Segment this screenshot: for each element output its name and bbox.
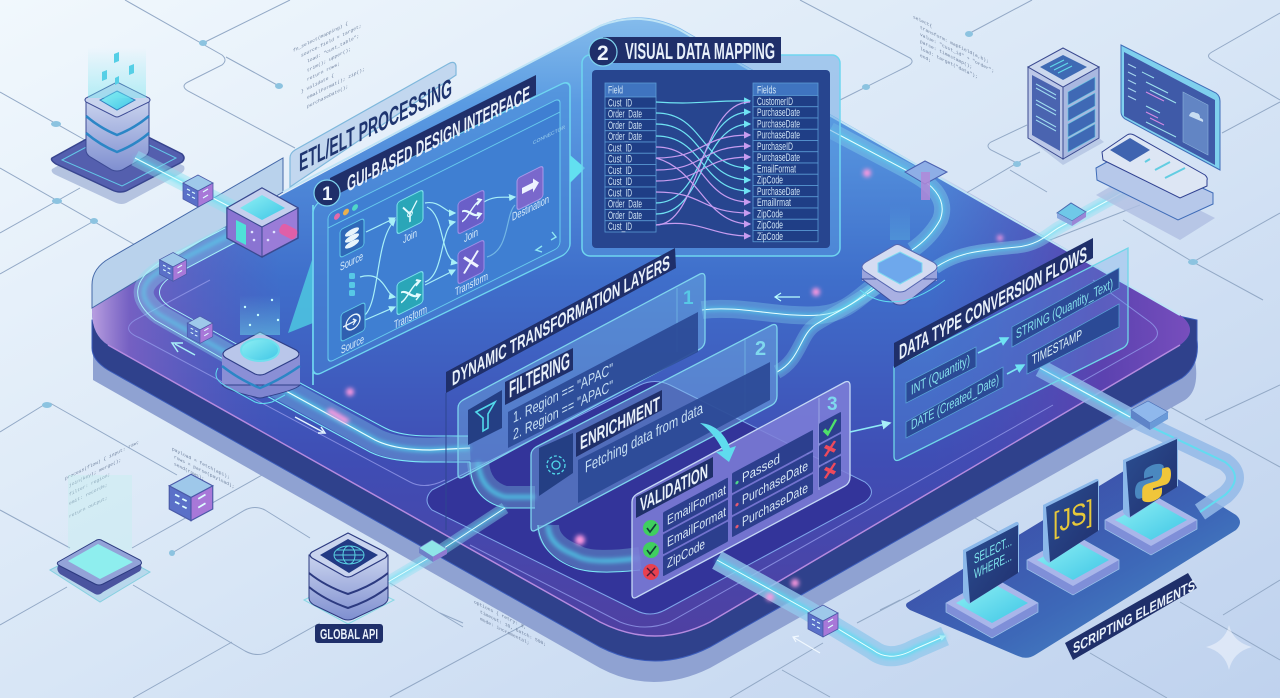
arrow: GUI to mapping [570, 155, 585, 183]
window [328, 95, 565, 363]
network node dots [42, 31, 1198, 556]
status circles [643, 520, 659, 580]
link box near workstation [1057, 203, 1086, 226]
mapping curves [656, 101, 750, 236]
connector box on conversion flow [1131, 401, 1168, 430]
flow: left loop [138, 228, 240, 360]
node: join second: Join [464, 225, 478, 245]
purple-blue main platform [92, 17, 1190, 636]
process cube: top [183, 175, 213, 207]
floor cube [169, 474, 213, 521]
target table: PurchaseDate [757, 118, 800, 130]
source table: Cust_ID [608, 154, 632, 166]
flow: validation to scripting [717, 560, 945, 656]
code snippet: bottom left: join(key); merge(); [69, 457, 121, 489]
source table: Order_Date [608, 108, 642, 120]
chip: TIMESTAMP: TIMESTAMP [1032, 326, 1082, 369]
flow: top edge to hub [830, 130, 942, 250]
code snippet: top centre: purchaseDate(); [307, 84, 348, 110]
code snippet: top centre: emailFormat(); zip(); [307, 66, 365, 101]
source table: Cust_ID [608, 98, 632, 110]
source table: Cust_ID [608, 188, 632, 200]
layer 3: validation [632, 382, 850, 598]
target table: PurchaseDate [757, 152, 800, 164]
layer 3: validation: VALIDATION [640, 459, 708, 517]
nav chevrons [536, 232, 556, 252]
code snippet: top right: select{ [913, 14, 932, 30]
card: SQL: WHERE... [974, 549, 1012, 583]
monitor [1121, 45, 1220, 170]
label: global API [315, 624, 383, 643]
pedestal: JS [1027, 534, 1119, 595]
card: JS: [JS] [1053, 493, 1093, 541]
layer 1: filtering: FILTERING [509, 348, 570, 404]
card: SQL [963, 522, 1019, 604]
code snippet: top right: parse: timestamp(); [920, 39, 972, 71]
node: join [397, 190, 423, 249]
panel glass [313, 80, 570, 377]
validation rows: ZipCode [667, 537, 705, 572]
python logo [1135, 459, 1171, 507]
process cube: left [160, 252, 186, 281]
code snippet: top centre: } validate { [301, 73, 334, 95]
layer divider line [445, 393, 447, 530]
code snippet: top centre: source.field = target; [301, 23, 361, 59]
card: JS [1043, 479, 1099, 563]
server rack [1028, 48, 1104, 165]
code snippet: bottom middle [474, 599, 546, 655]
sparkle mark [1206, 625, 1252, 670]
right purple tint [930, 170, 1190, 490]
heading banner: 2 [597, 42, 609, 65]
layer 1: filtering: 2. Region == "APAC" [513, 378, 613, 444]
code snippet: bottom middle: timeout: 10, batch: 500; [480, 609, 546, 648]
node: destination [512, 162, 549, 224]
code snippet: top right [913, 14, 994, 96]
target table: EmailFormat [757, 164, 796, 176]
heading banner [894, 238, 1093, 368]
heading banner: DYNAMIC TRANSFORMATION LAYERS [452, 251, 670, 391]
round node [216, 295, 300, 404]
flow: centre-left bends [470, 462, 640, 572]
target table [753, 83, 818, 243]
code snippet: top centre: trim(); upper(); [307, 46, 351, 74]
chip: INT [906, 347, 976, 403]
validation rows: PurchaseDate [742, 480, 808, 531]
pink data particles [326, 169, 1003, 601]
node: transform second: Transform [455, 269, 488, 299]
heading banner: GUI-BASED DESIGN INTERFACE [347, 81, 530, 197]
code snippet: top right: transform: mapField(a,b); [920, 25, 989, 65]
source table: Field [608, 84, 623, 96]
code snippet: bottom left: emit: records; [69, 482, 107, 507]
chip: DATE: DATE (Created_Date) [911, 371, 999, 434]
code snippet: top centre: fn_select(mapping) { [293, 21, 348, 54]
validation rows: Passed [742, 451, 780, 487]
source table: Cust_ID [608, 165, 632, 177]
panel: dynamic transformation layers [446, 248, 850, 598]
node: transform: Transform [394, 302, 427, 332]
node: source: Source [340, 249, 363, 274]
source table: Order_Date [608, 198, 642, 210]
node: join second [458, 190, 484, 248]
source table: Cust_ID [608, 221, 632, 233]
node: source second [341, 302, 365, 357]
target table: ZipCode [757, 231, 783, 243]
node: source [340, 218, 364, 274]
target table: PurchaseDate [757, 186, 800, 198]
target table: ZipCode [757, 208, 783, 220]
left purple tint [92, 197, 280, 442]
scripting base [906, 462, 1240, 658]
flow: centre to hub upper [702, 282, 880, 315]
rim highlight [108, 345, 1180, 636]
layer 3: validation: 3 [827, 394, 838, 415]
layer 1: filtering: 1. Region == "APAC" [513, 361, 613, 427]
pale pad [50, 475, 150, 602]
chip: STRING [1012, 268, 1119, 347]
flow: lower-left channel [265, 375, 470, 462]
global API database [304, 533, 394, 624]
title banner: ETL/ELT processing: ETL/ELT PROCESSING [299, 72, 452, 178]
heading banner: VISUAL DATA MAPPING [625, 38, 775, 64]
panel glass [582, 55, 840, 256]
process cube: bottom [808, 605, 838, 637]
card: Python [1123, 437, 1178, 518]
shadow under platform [93, 300, 1196, 682]
source table [605, 83, 656, 233]
layer 2: enrichment: 2 [755, 338, 766, 360]
source table: Order_Date [608, 131, 642, 143]
chip: INT: INT (Quantity) [911, 352, 970, 399]
inner dark tray [427, 382, 872, 614]
card: SQL: SELECT... [974, 534, 1012, 568]
validation rows: EmailFormat [667, 504, 726, 551]
target table: EmailIrmat [757, 197, 791, 209]
target table: PurchaseDate [757, 130, 800, 142]
process cube: lower left [187, 316, 213, 343]
stack dots [349, 273, 355, 296]
flow: API to platform [388, 508, 505, 582]
flow: data panel to python [1040, 368, 1235, 512]
heading banner: 1 [322, 184, 333, 205]
code snippet: top right: end; [920, 53, 931, 64]
code snippet: bottom left [65, 439, 139, 522]
label: scripting elements: SCRIPTING ELEMENTS [1073, 577, 1195, 658]
validation rows: EmailFormat [667, 482, 726, 529]
layer 2: enrichment [531, 324, 777, 531]
code snippet: bottom centre: send(rows); [174, 461, 204, 482]
hub node right [860, 205, 945, 305]
flow: source to first cube [135, 158, 240, 212]
code snippet: bottom middle: options { retry: 3, [474, 599, 526, 631]
heading banner [314, 75, 536, 206]
node: transform [394, 268, 427, 332]
upper edge highlight [283, 19, 1180, 315]
chip: DATE [906, 367, 1003, 438]
conversion arrows [978, 338, 1024, 374]
validation rows: PurchaseDate [742, 458, 808, 509]
target table: CustomerID [757, 96, 793, 108]
target table: PurchaseID [757, 141, 793, 153]
heading banner [589, 37, 781, 66]
code snippet: top centre: return rows; [307, 61, 340, 83]
panel: visual data mapping [582, 37, 840, 256]
target table: Fields [757, 84, 776, 96]
left flow arrow [172, 343, 195, 355]
source table: Order_Date [608, 120, 642, 132]
heading banner [446, 248, 676, 393]
connector box near API [419, 540, 447, 562]
pedestal: Python [1105, 494, 1197, 555]
target table: ZipCode [757, 220, 783, 232]
code snippet: top right: value: "cust_id" + "order"; [920, 32, 994, 75]
curved arrow: enrichment to validation [700, 423, 736, 462]
code snippet: bottom left: return output; [69, 495, 107, 520]
source table: Cust_ID [608, 176, 632, 188]
panel: GUI-based design interface [313, 75, 570, 377]
window: CONNECTOR [533, 125, 565, 146]
node: source second: Source [341, 332, 364, 357]
code snippet: bottom middle: mode: incremental; [480, 616, 529, 647]
layer 1: filtering: 1 [683, 288, 694, 309]
code snippet: bottom centre: rows = parse(payload); [174, 454, 234, 490]
label: scripting elements [1065, 573, 1197, 660]
navy platform layer [92, 200, 1197, 661]
layer 2: enrichment: Fetching data from data [585, 399, 703, 477]
validation heading [636, 457, 713, 518]
layer 1: filtering [458, 274, 705, 478]
target table: ZipCode [757, 174, 783, 186]
code snippet: top centre: load: "cust_table"; [307, 33, 359, 65]
code snippet: top centre [293, 12, 365, 117]
globe icon [334, 546, 364, 564]
panel: data type conversion flows [894, 238, 1128, 460]
code snippet: bottom left: filter: region; [69, 472, 110, 498]
floor arrow [793, 636, 820, 653]
arrow: validation to conversion [850, 423, 890, 432]
workstation slabs [1096, 134, 1215, 240]
main hub cube [227, 188, 299, 257]
code snippet: bottom centre: payload = fetch(api); [172, 446, 230, 481]
code snippet: top right: load: target("data"); [920, 46, 978, 80]
validation card [632, 382, 850, 598]
small tag on edge [905, 161, 947, 200]
lower flow arrow [295, 417, 325, 433]
code snippet: bottom left: process(flow) { input: raw; [65, 439, 139, 482]
source database [52, 48, 184, 204]
heading text: DATA TYPE CONVERSION FLOWS [899, 242, 1087, 365]
title banner: ETL/ELT processing [290, 62, 456, 187]
source table: Order_Date [608, 210, 642, 222]
chip: STRING: STRING (Quantity_Text) [1016, 275, 1113, 343]
code snippet: bottom centre [172, 446, 234, 497]
glass backing edge [288, 205, 313, 385]
layer 2: enrichment: ENRICHMENT [580, 393, 660, 455]
flow: hub to workstation [935, 190, 1127, 268]
source table: Cust_ID [608, 142, 632, 154]
hub arrow [775, 293, 800, 301]
validation rows [663, 412, 841, 576]
target table: PurchaseDate [757, 107, 800, 119]
node: join: Join [403, 226, 417, 246]
pedestal: SQL [946, 577, 1038, 638]
flow: centre to hub lower [777, 285, 880, 372]
node: destination: Destination [512, 192, 549, 224]
dark board [592, 70, 830, 248]
back glass flap [92, 158, 283, 308]
label: global API: GLOBAL API [320, 626, 378, 643]
node: transform second [455, 238, 488, 299]
inner guide line [129, 280, 1158, 627]
connectors [360, 197, 515, 320]
